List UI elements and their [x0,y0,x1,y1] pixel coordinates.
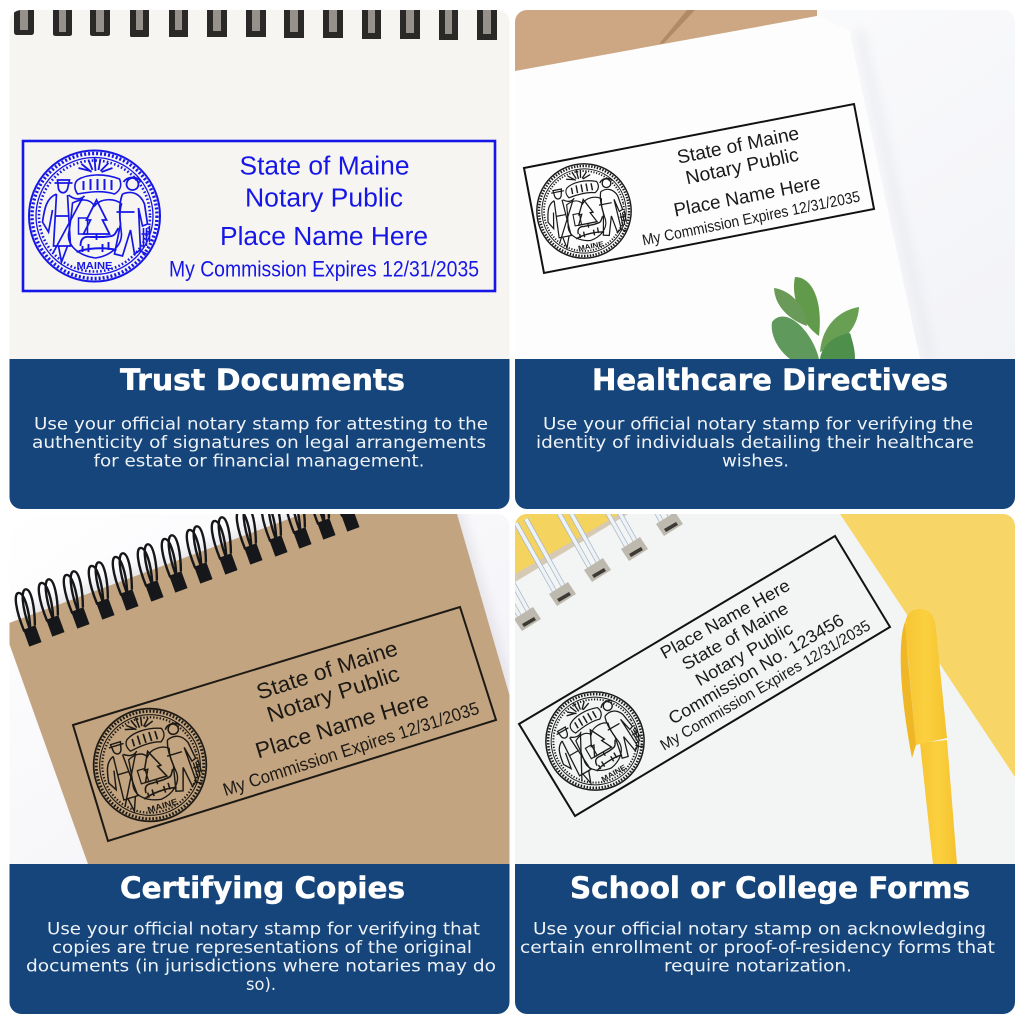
panel: Trust Documents [9,10,510,509]
caption: Healthcare Directives: identity of individuals detailing their healthcare [536,433,974,453]
seal of Maine [529,156,639,266]
blue notary stamp: My Commission Expires 12/31/2035 [169,256,479,282]
black notary stamp: Commission No. 123456 [665,610,847,728]
black notary stamp: Notary Public [684,145,801,189]
caption: Trust Documents [10,359,510,509]
black notary stamp: My Commission Expires 12/31/2035 [641,189,862,249]
black notary stamp: My Commission Expires 12/31/2035 [657,617,874,754]
caption: Healthcare Directives [515,359,1015,509]
caption: School or College Forms: certain enrollment or proof-of-residency forms that [520,938,995,958]
photo: paper on envelope with leaves [515,10,1015,360]
black notary stamp: Place Name Here [252,687,432,763]
seal of Maine [528,674,662,808]
caption: Certifying Copies: so). [246,975,276,995]
seal of Maine [80,695,220,835]
seal of Maine: MAINE [146,796,179,815]
photo: white notebook on yellow with pen [515,514,1015,864]
black spiral binding [14,514,360,647]
panel: Healthcare Directives [515,10,1015,509]
black notary stamp: State of Maine [253,635,401,705]
black notary stamp [524,104,874,273]
blue notary stamp: Notary Public [245,184,403,212]
caption: Healthcare Directives: Use your official notary stamp for verifying the [543,414,973,434]
black notary stamp [519,536,890,816]
caption: Certifying Copies: Use your official notary stamp for verifying that [47,920,480,940]
seal of Maine: MAINE [76,261,113,272]
caption: Certifying Copies [10,864,510,1014]
caption: Healthcare Directives: Healthcare Directives [592,363,948,397]
white spiral binding [515,514,683,631]
seal of Maine: MAINE [577,239,605,253]
blue notary stamp: State of Maine [240,152,410,180]
caption: Trust Documents: authenticity of signatures on legal arrangements [32,433,486,453]
black notary stamp: Place Name Here [672,172,822,222]
panel: School or College Forms [515,514,1015,1014]
black notary stamp: My Commission Expires 12/31/2035 [220,698,482,800]
leaves [772,277,859,359]
caption: School or College Forms: Use your official notary stamp on acknowledging [533,920,986,940]
black notary stamp: Place Name Here [657,575,793,663]
notebook spiral rings [14,10,497,40]
black notary stamp: State of Maine [675,123,801,169]
black notary stamp: Notary Public [264,661,402,727]
caption: Certifying Copies: documents (in jurisdictions where notaries may do [26,956,496,976]
panel: Certifying Copies [9,473,516,1014]
yellow pen [901,609,957,864]
seal of Maine: MAINE [600,763,628,784]
blue notary stamp: Place Name Here [220,223,428,251]
caption: Trust Documents: Trust Documents [120,363,405,397]
caption: Healthcare Directives: wishes. [722,452,789,472]
photo: kraft notebook [10,514,510,864]
black notary stamp [73,607,496,841]
caption: School or College Forms: require notarization. [664,956,852,976]
caption: School or College Forms [515,864,1015,1014]
caption: School or College Forms: School or College Forms [570,871,970,905]
caption: Trust Documents: for estate or financial management. [94,452,424,472]
black notary stamp: State of Maine [678,598,792,674]
caption: Certifying Copies: Certifying Copies [120,871,405,905]
seal of Maine [29,150,160,282]
black notary stamp: Notary Public [692,618,796,690]
caption: Trust Documents: Use your official notary stamp for attesting to the [34,414,488,434]
photo: notebook with blue stamp [9,10,510,360]
blue notary stamp [23,141,495,291]
caption: Certifying Copies: copies are true representations of the original [52,938,472,958]
